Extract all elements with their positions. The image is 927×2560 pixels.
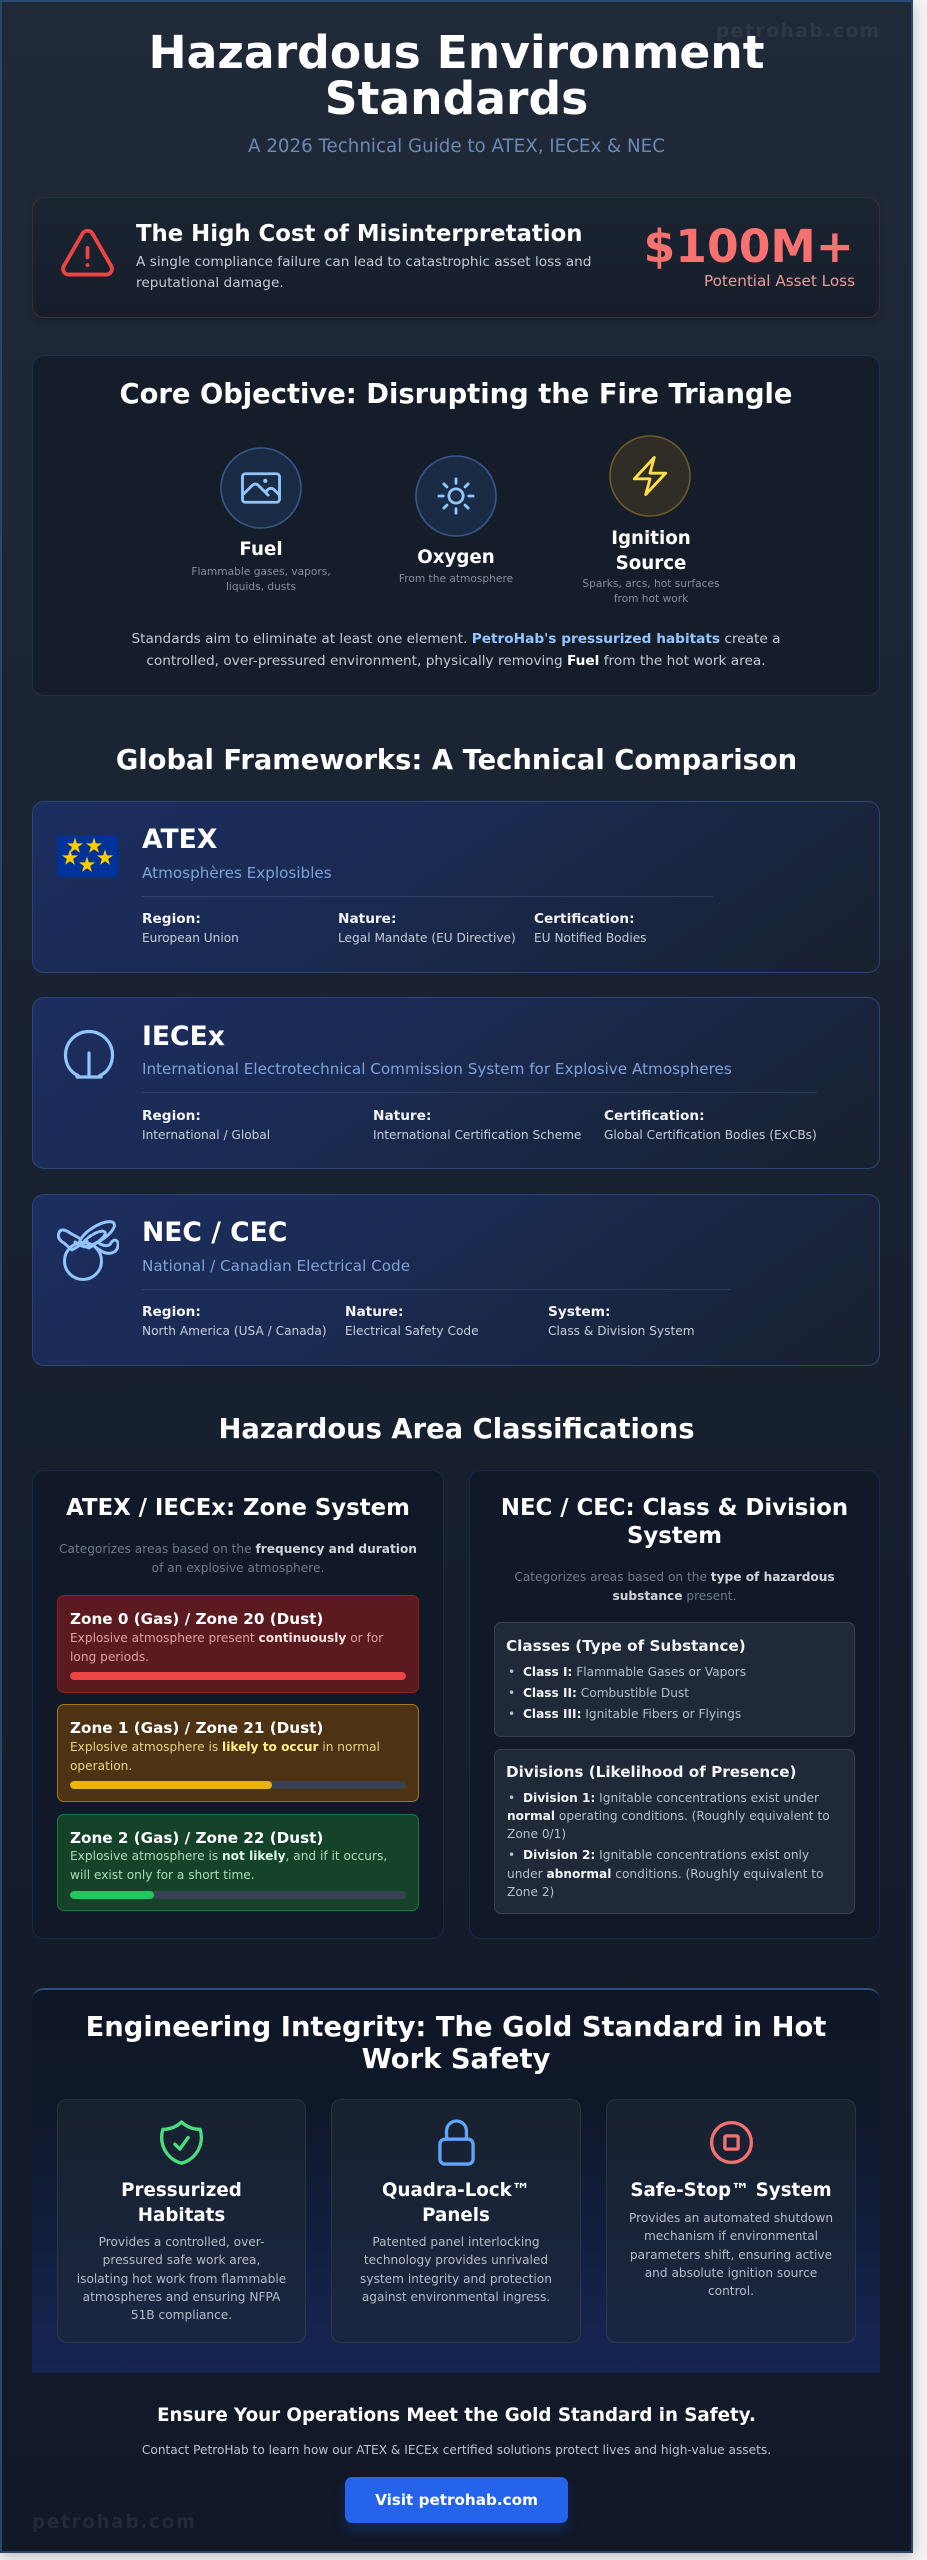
level bar 25% (70, 1891, 406, 1899)
explanation paragraph: Standards aim to eliminate at least one element. PetroHab's pressurized habitats create a (131, 631, 781, 647)
alert body: reputational damage. (136, 274, 284, 290)
desc: ignition source: Sparks, arcs, hot surfaces (582, 576, 720, 590)
box: divisions: • (508, 1791, 515, 1805)
box: classes: • (508, 1686, 515, 1700)
heading: Engineering Integrity: The Gold Standard in Hot (86, 2012, 826, 2043)
nature (373, 1108, 581, 1142)
panel: fire triangle (32, 355, 880, 696)
heading: global frameworks: Global Frameworks: A Technical Comparison (116, 745, 797, 776)
heading (501, 1495, 848, 1549)
description: control. (708, 2284, 754, 2298)
system: Class & Division System (548, 1324, 695, 1338)
description: mechanism if environmental (644, 2229, 818, 2243)
box: classes: Class III: Ignitable Fibers or Flyings (523, 1707, 741, 1721)
title: Standards (325, 72, 588, 125)
desc: ignition source: from hot work (614, 592, 688, 604)
zone 2: Zone 2 (Gas) / Zone 22 (Dust) (70, 1829, 323, 1847)
alert heading: The High Cost of Misinterpretation (136, 221, 582, 247)
call to action heading: Ensure Your Operations Meet the Gold Standard in Safety. (157, 2405, 756, 2426)
icon: NEC emblem (57, 1220, 119, 1281)
description: atmospheres and ensuring NFPA (83, 2290, 280, 2304)
desc: ignition source (582, 576, 720, 604)
intro (514, 1570, 835, 1602)
desc: fuel (191, 564, 331, 592)
box: divisions: Zone 0/1) (507, 1827, 566, 1841)
zone 0: Zone 0 (Gas) / Zone 20 (Dust) (70, 1610, 323, 1628)
certification: Certification: (604, 1108, 705, 1124)
box: divisions: Zone 2) (507, 1885, 554, 1899)
zone 2: Explosive atmosphere is not likely, and if it occurs, (70, 1849, 387, 1863)
intro (59, 1542, 417, 1574)
title: Pressurized (121, 2180, 242, 2201)
feature: quadra-lock panels (331, 2099, 581, 2343)
certification: Global Certification Bodies (ExCBs) (604, 1128, 817, 1142)
desc: fuel: Flammable gases, vapors, (191, 564, 331, 578)
system: System: (548, 1304, 610, 1320)
description: technology provides unrivaled (364, 2253, 548, 2267)
box: classes: Class II: Combustible Dust (523, 1686, 689, 1700)
heading: ATEX / IECEx: Zone System (66, 1495, 410, 1521)
region: North America (USA / Canada) (142, 1324, 327, 1338)
region (142, 911, 239, 945)
box: divisions: normal operating conditions. (Roughly equivalent to (507, 1809, 830, 1823)
region: Region: (142, 911, 201, 927)
region (142, 1304, 327, 1338)
system (548, 1304, 695, 1338)
description: Patented panel interlocking (372, 2235, 540, 2249)
panel: zone system (32, 1470, 444, 1939)
explanation paragraph: controlled, over-pressured environment, physically removing Fuel from the hot work area. (146, 652, 766, 668)
box: divisions: Divisions (Likelihood of Presence) (506, 1763, 796, 1781)
icon: stop (710, 2121, 753, 2164)
region: International / Global (142, 1128, 270, 1142)
watermark bottom: petrohab.com (32, 2512, 197, 2533)
watermark top: petrohab.com (716, 21, 881, 42)
icon: warning triangle (61, 228, 114, 276)
title: Habitats (138, 2204, 225, 2226)
title: Panels (422, 2204, 490, 2226)
explanation paragraph (131, 631, 781, 668)
feature: pressurized habitats (57, 2099, 306, 2343)
heading (86, 2012, 826, 2075)
icon: fuel (220, 447, 302, 529)
label: ignition source: Ignition (611, 528, 691, 548)
nature: Nature: (338, 911, 396, 927)
certification (604, 1108, 817, 1142)
description: Provides a controlled, over- (99, 2235, 264, 2249)
title (382, 2180, 530, 2226)
box: classes: • (508, 1665, 515, 1679)
region: Region: (142, 1108, 201, 1124)
box: classes (494, 1622, 855, 1737)
icon: oxygen (415, 455, 497, 537)
box: divisions: Division 2: Ignitable concentrations exist only (523, 1848, 809, 1862)
intro: Categorizes areas based on the frequency and duration (59, 1542, 417, 1556)
heading: Core Objective: Disrupting the Fire Triangle (120, 379, 792, 410)
feature: safe-stop system (606, 2099, 856, 2343)
description: system integrity and protection (360, 2272, 552, 2286)
description: parameters shift, ensuring active (630, 2248, 832, 2262)
description (629, 2211, 833, 2298)
zone 1 (57, 1704, 419, 1802)
region: European Union (142, 931, 239, 945)
zone 0: Explosive atmosphere present continuously or for (70, 1631, 383, 1645)
panel: ATEX (32, 801, 880, 973)
nature: Nature: (345, 1304, 403, 1320)
certification (534, 911, 647, 945)
name: ATEX (142, 824, 217, 855)
box: divisions: under abnormal conditions. (Roughly equivalent to (507, 1867, 824, 1881)
title: Safe-Stop™ System (630, 2180, 832, 2201)
box: classes: Class I: Flammable Gases or Vapors (523, 1665, 746, 1679)
desc: oxygen: From the atmosphere (399, 572, 513, 584)
panel: NEC / CEC (32, 1194, 880, 1366)
nature (338, 911, 516, 945)
label: ignition source: Source (616, 552, 686, 574)
description: pressured safe work area, (103, 2253, 260, 2267)
stat: $100M+: $100M+ (644, 220, 854, 273)
full name: Atmosphères Explosibles (142, 864, 332, 882)
heading: System (627, 1523, 722, 1549)
level bar 60% (70, 1781, 406, 1789)
intro: Categorizes areas based on the type of hazardous (514, 1570, 835, 1584)
alert body: A single compliance failure can lead to catastrophic asset loss and (136, 254, 591, 270)
intro: of an explosive atmosphere. (152, 1560, 324, 1574)
name: NEC / CEC (142, 1217, 287, 1248)
alert body (136, 254, 591, 290)
panel: IECEx (32, 997, 880, 1169)
icon: shield (160, 2120, 203, 2165)
level bar 100% (70, 1672, 406, 1680)
nature: Legal Mandate (EU Directive) (338, 931, 516, 945)
description: isolating hot work from flammable (77, 2272, 286, 2286)
button (345, 2477, 568, 2523)
name: IECEx (142, 1021, 225, 1052)
zone 1: Explosive atmosphere is likely to occur in normal (70, 1740, 380, 1754)
description: against environmental ingress. (362, 2290, 550, 2304)
title (121, 2180, 242, 2226)
box: divisions (494, 1749, 855, 1914)
panel: engineering integrity (32, 1988, 880, 2373)
panel: class and division system (469, 1470, 880, 1939)
certification: Certification: (534, 911, 635, 927)
zone 0 (57, 1595, 419, 1693)
zone 2 (57, 1814, 419, 1911)
call to action text: Contact PetroHab to learn how our ATEX & IECEx certified solutions protect lives and high-value assets. (142, 2443, 771, 2457)
full name: National / Canadian Electrical Code (142, 1257, 410, 1275)
panel: high cost alert (32, 197, 880, 318)
title: Hazardous Environment (148, 26, 765, 79)
region: Region: (142, 1304, 201, 1320)
certification: EU Notified Bodies (534, 931, 647, 945)
description: Provides an automated shutdown (629, 2211, 833, 2225)
description: and absolute ignition source (645, 2266, 817, 2280)
zone 1: operation. (70, 1758, 132, 1772)
box: classes: • (508, 1707, 515, 1721)
box: divisions: Division 1: Ignitable concentrations exist under (523, 1791, 819, 1805)
title (148, 26, 765, 125)
nature: International Certification Scheme (373, 1128, 581, 1142)
region (142, 1108, 270, 1142)
full name: International Electrotechnical Commission System for Explosive Atmospheres (142, 1060, 732, 1078)
label: oxygen: Oxygen (417, 547, 495, 568)
heading: NEC / CEC: Class & Division (501, 1495, 848, 1521)
zone 1: Zone 1 (Gas) / Zone 21 (Dust) (70, 1719, 323, 1737)
nature: Electrical Safety Code (345, 1324, 479, 1338)
button: Visit petrohab.com (375, 2491, 538, 2509)
nature (345, 1304, 479, 1338)
zone 2: will exist only for a short time. (70, 1868, 255, 1882)
box: divisions: • (508, 1848, 515, 1862)
title: Quadra-Lock™ (382, 2180, 530, 2201)
description: 51B compliance. (131, 2308, 232, 2322)
description (360, 2235, 552, 2304)
icon: ignition (609, 435, 691, 517)
subtitle: A 2026 Technical Guide to ATEX, IECEx & NEC (248, 136, 665, 157)
icon: lock (438, 2119, 475, 2166)
label: fuel: Fuel (239, 539, 283, 560)
heading: Work Safety (362, 2044, 550, 2075)
description (77, 2235, 286, 2322)
icon: IEC globe (64, 1030, 114, 1079)
heading: hazardous area classifications: Hazardous Area Classifications (219, 1414, 694, 1445)
box: classes: Classes (Type of Substance) (506, 1637, 746, 1655)
label: ignition source (611, 528, 691, 574)
desc: fuel: liquids, dusts (226, 580, 296, 592)
intro: substance present. (613, 1588, 736, 1602)
zone 0: long periods. (70, 1650, 149, 1664)
nature: Nature: (373, 1108, 431, 1124)
stat label: Potential Asset Loss (704, 272, 855, 290)
icon: EU flag (57, 836, 118, 877)
